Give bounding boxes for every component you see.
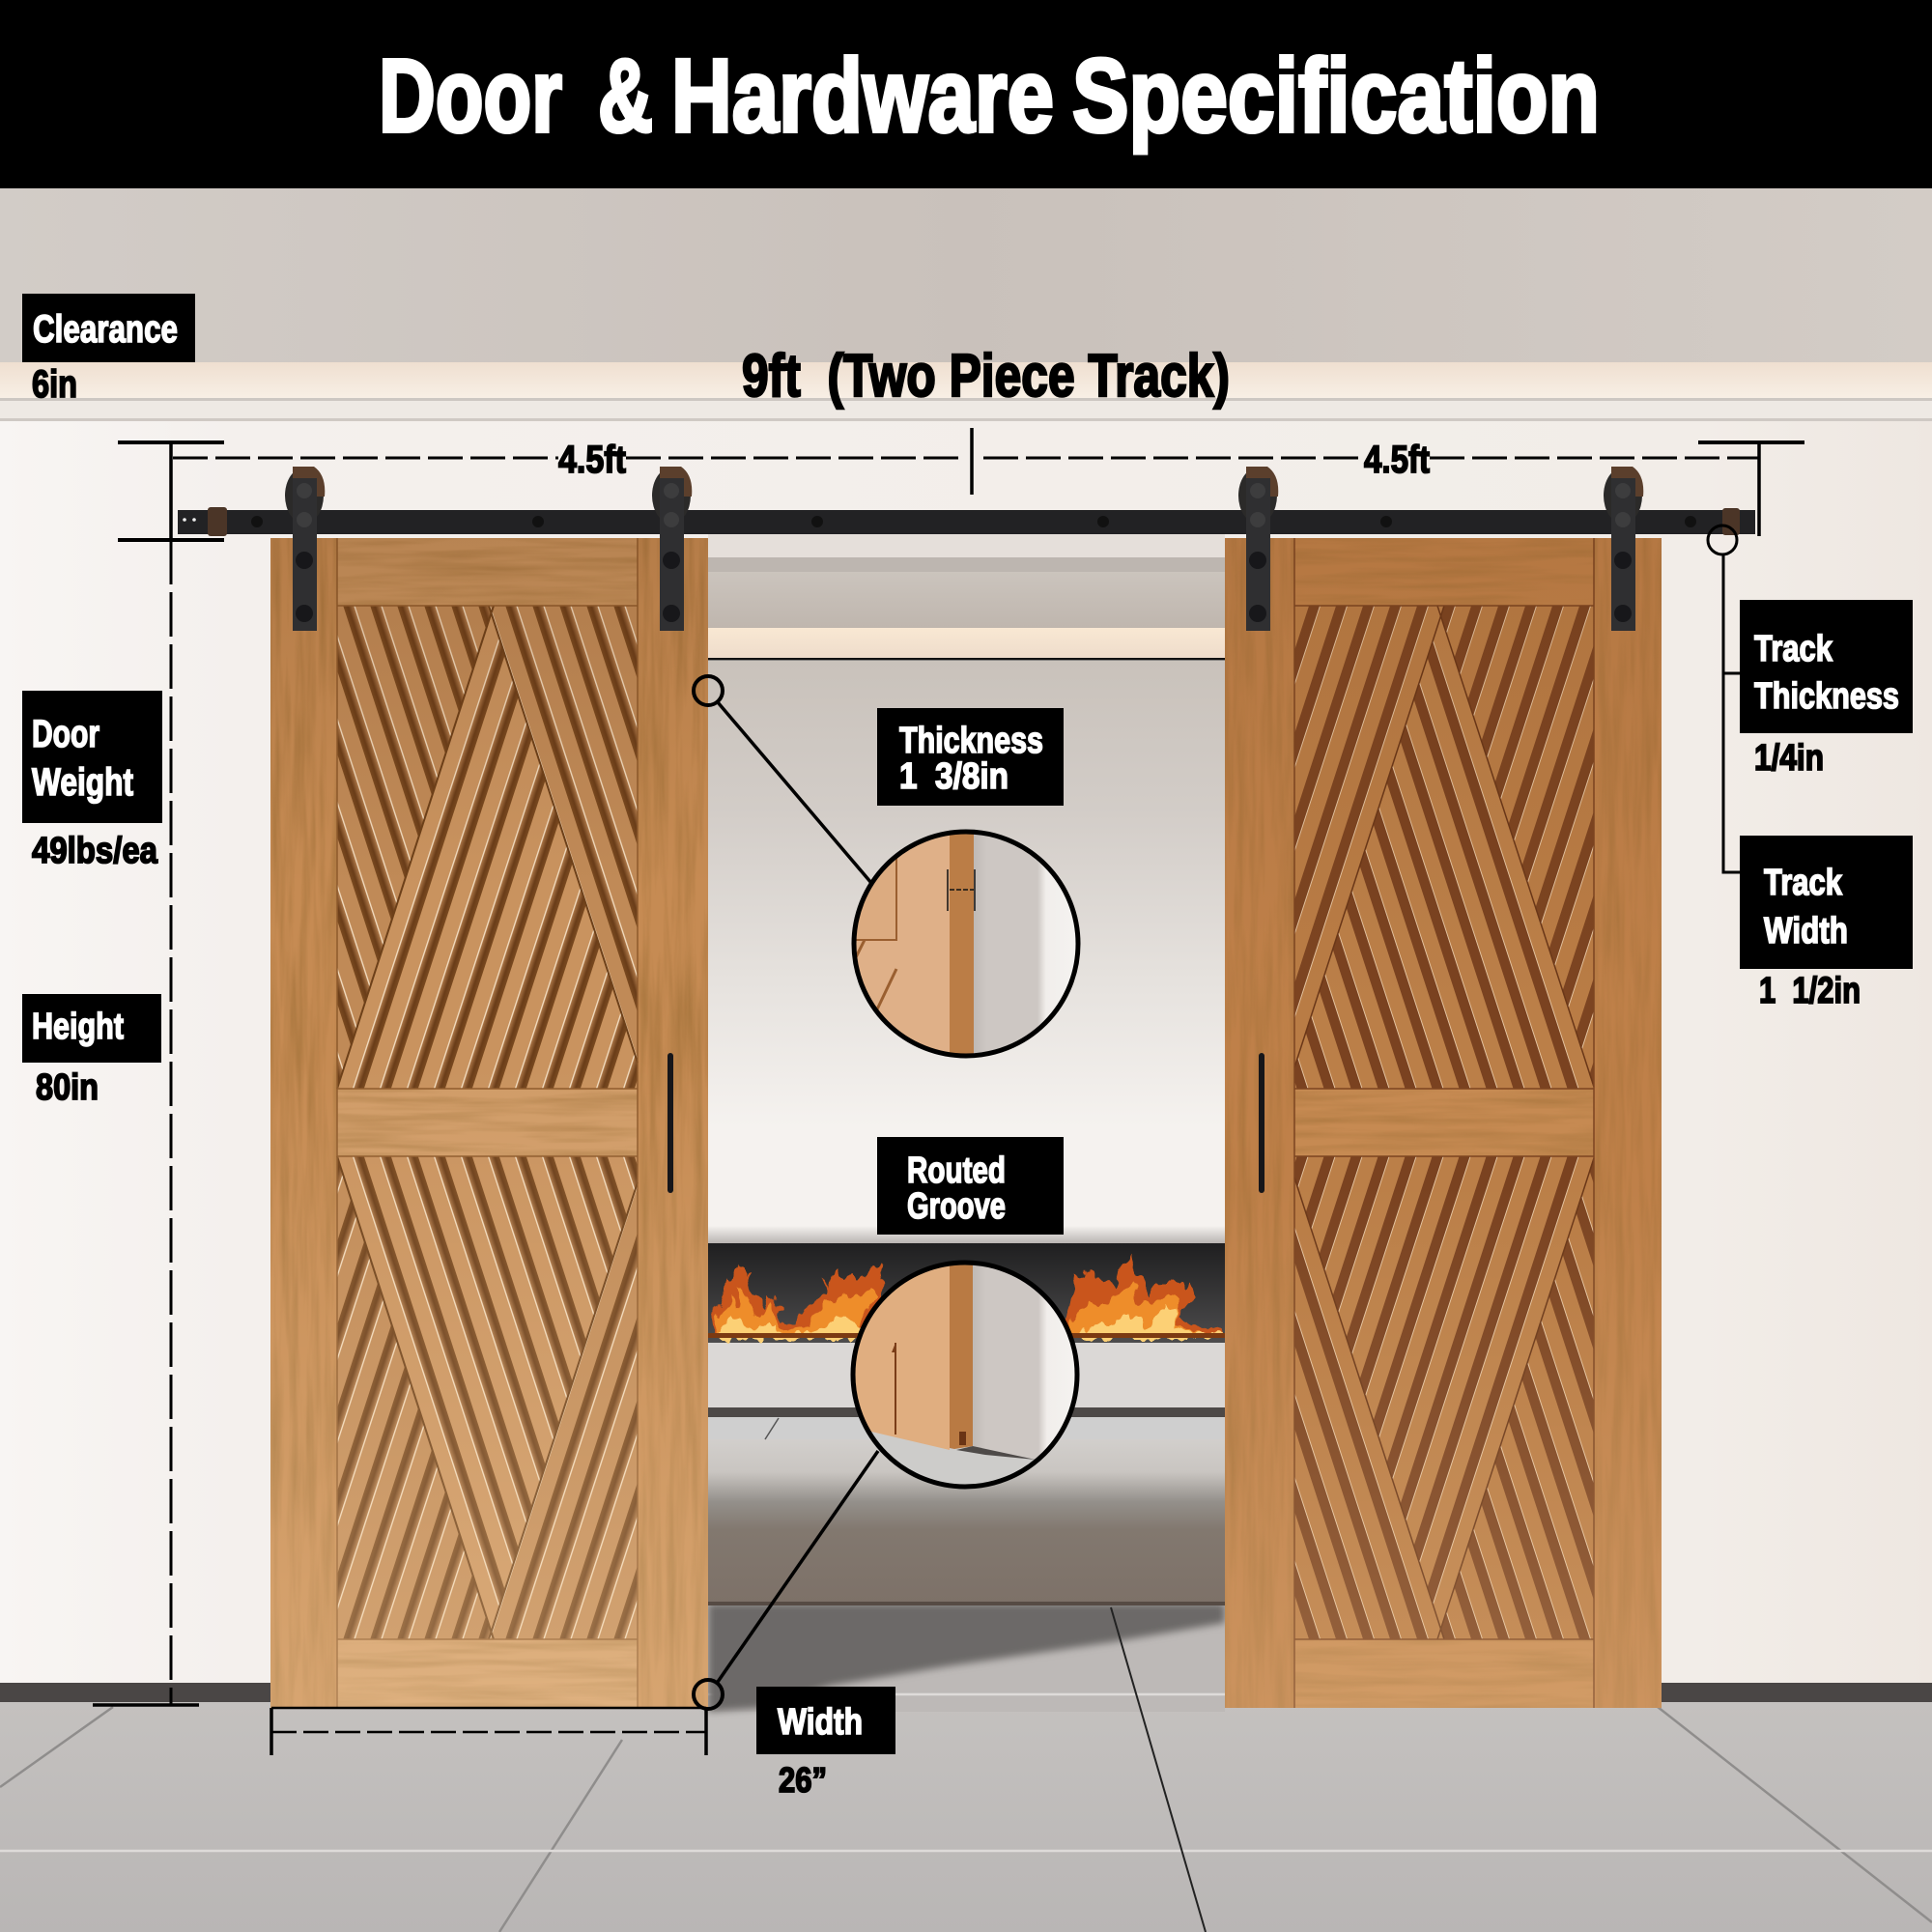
background room seen through the opening	[708, 534, 1225, 1605]
title: Specification	[1072, 37, 1600, 154]
width label: 26”	[779, 1760, 827, 1800]
thickness label	[877, 708, 1064, 806]
clearance label: 6in	[32, 363, 77, 406]
left door upper diagonal panel	[337, 606, 638, 1089]
track width label: Track	[1764, 863, 1843, 903]
height label: 80in	[36, 1067, 99, 1108]
right door handle	[1259, 1053, 1264, 1193]
track callout connector	[1708, 526, 1740, 872]
width dimension	[271, 1708, 706, 1755]
height label: Height	[32, 1007, 124, 1047]
callout leader: routed groove	[694, 1451, 878, 1709]
left barn door	[270, 538, 708, 1708]
routed groove label: Routed	[907, 1151, 1006, 1191]
right door lower diagonal panel	[1294, 1156, 1594, 1639]
track thickness label: Track	[1754, 629, 1833, 669]
clearance label	[22, 294, 195, 406]
thickness label: 1 3/8in	[899, 756, 1009, 797]
door weight label: 49lbs/ea	[32, 831, 158, 871]
sliding track rail	[178, 507, 1755, 536]
callout circle: routed groove detail	[850, 1261, 1082, 1492]
title: Door	[379, 37, 562, 154]
track length heading: 9ft (Two Piece Track)	[742, 343, 1230, 410]
floor with tile joints	[0, 1604, 1932, 1932]
fireplace flames right	[1062, 1259, 1225, 1339]
door weight label: Door	[32, 713, 99, 755]
routed groove label: Groove	[907, 1186, 1006, 1227]
right 4.5ft label: 4.5ft	[1364, 439, 1430, 481]
width label	[756, 1687, 895, 1800]
height label	[22, 994, 161, 1108]
door weight label: Weight	[32, 761, 133, 804]
track thickness label: 1/4in	[1754, 738, 1824, 779]
room background: ceiling, cove and wall	[0, 188, 1932, 1702]
callout leader: thickness	[694, 676, 871, 883]
door weight label	[22, 691, 162, 871]
width label: Width	[778, 1702, 863, 1743]
left door lower diagonal panel	[337, 1156, 638, 1639]
thickness label: Thickness	[899, 721, 1043, 761]
clearance label: Clearance	[33, 308, 178, 351]
title	[379, 37, 1600, 154]
routed groove label	[877, 1137, 1064, 1235]
hanger 3	[1238, 467, 1278, 631]
fireplace flames left	[708, 1263, 887, 1339]
right door upper diagonal panel	[1294, 606, 1594, 1089]
track width label	[1740, 836, 1913, 1011]
track thickness label: Thickness	[1754, 676, 1899, 717]
left door handle	[668, 1053, 673, 1193]
callout circle: door thickness detail	[850, 826, 1080, 1063]
title: &	[598, 37, 653, 154]
hanger 4	[1604, 467, 1643, 631]
hanger 1	[285, 467, 325, 631]
track length dimension lines	[118, 428, 1804, 540]
hanger 2	[652, 467, 692, 631]
height dimension line	[93, 540, 199, 1705]
right barn door	[1225, 538, 1662, 1708]
left 4.5ft label: 4.5ft	[558, 439, 626, 481]
track width label: Width	[1764, 911, 1848, 952]
title: Hardware	[671, 37, 1054, 154]
track width label: 1 1/2in	[1759, 971, 1861, 1011]
track thickness label	[1740, 600, 1913, 779]
title bar	[0, 0, 1932, 188]
